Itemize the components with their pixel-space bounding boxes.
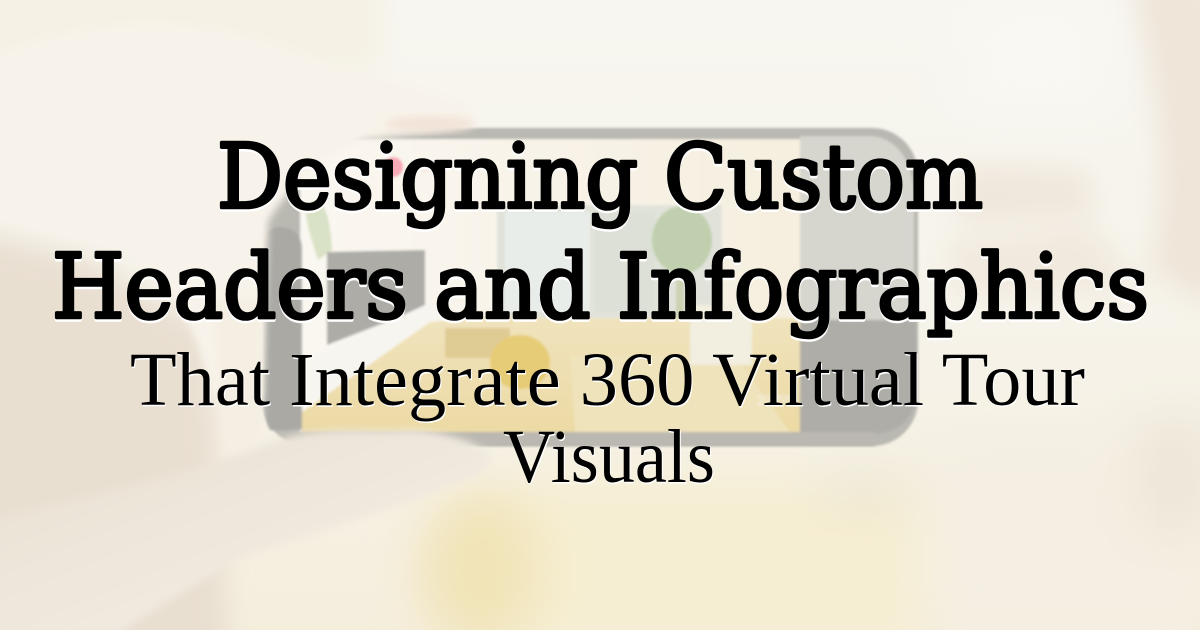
left hand fingers — [0, 22, 476, 400]
white chair — [690, 305, 752, 365]
yellow cushion — [490, 335, 550, 389]
phone — [262, 128, 918, 446]
side finger — [212, 300, 262, 460]
plant right — [652, 206, 712, 274]
plant left — [305, 201, 332, 260]
iso label: ISO 800 — [750, 158, 798, 173]
right controls panel — [800, 136, 914, 330]
thumb and forearm — [0, 430, 490, 630]
title line 1: Designing Custom — [217, 124, 983, 228]
tv — [327, 250, 425, 345]
subtitle line 1: That Integrate 360 Virtual Tour — [130, 338, 1085, 422]
phone screen — [264, 136, 916, 446]
left hand shading — [0, 0, 380, 630]
time label: 23:55 — [757, 392, 792, 408]
subtitle line 2: Visuals — [503, 415, 715, 499]
window — [497, 205, 722, 335]
bottom edge — [300, 432, 875, 446]
floor — [302, 318, 800, 432]
tv unit — [302, 305, 445, 400]
title line 2: Headers and Infographics — [52, 234, 1149, 338]
title line 2: Headers and Infographics — [52, 237, 1149, 341]
right hand — [945, 0, 1200, 310]
subtitle line 1: That Integrate 360 Virtual Tour — [131, 340, 1086, 424]
subtitle line 2: Visuals — [504, 416, 716, 500]
left notch — [264, 227, 302, 430]
title line 1: Designing Custom — [217, 127, 983, 231]
rec dot — [383, 157, 403, 177]
phone body — [262, 128, 918, 446]
rec label: REC — [416, 163, 436, 173]
table — [445, 328, 510, 358]
fingertip tint — [385, 116, 475, 132]
light floor strip — [570, 355, 790, 432]
